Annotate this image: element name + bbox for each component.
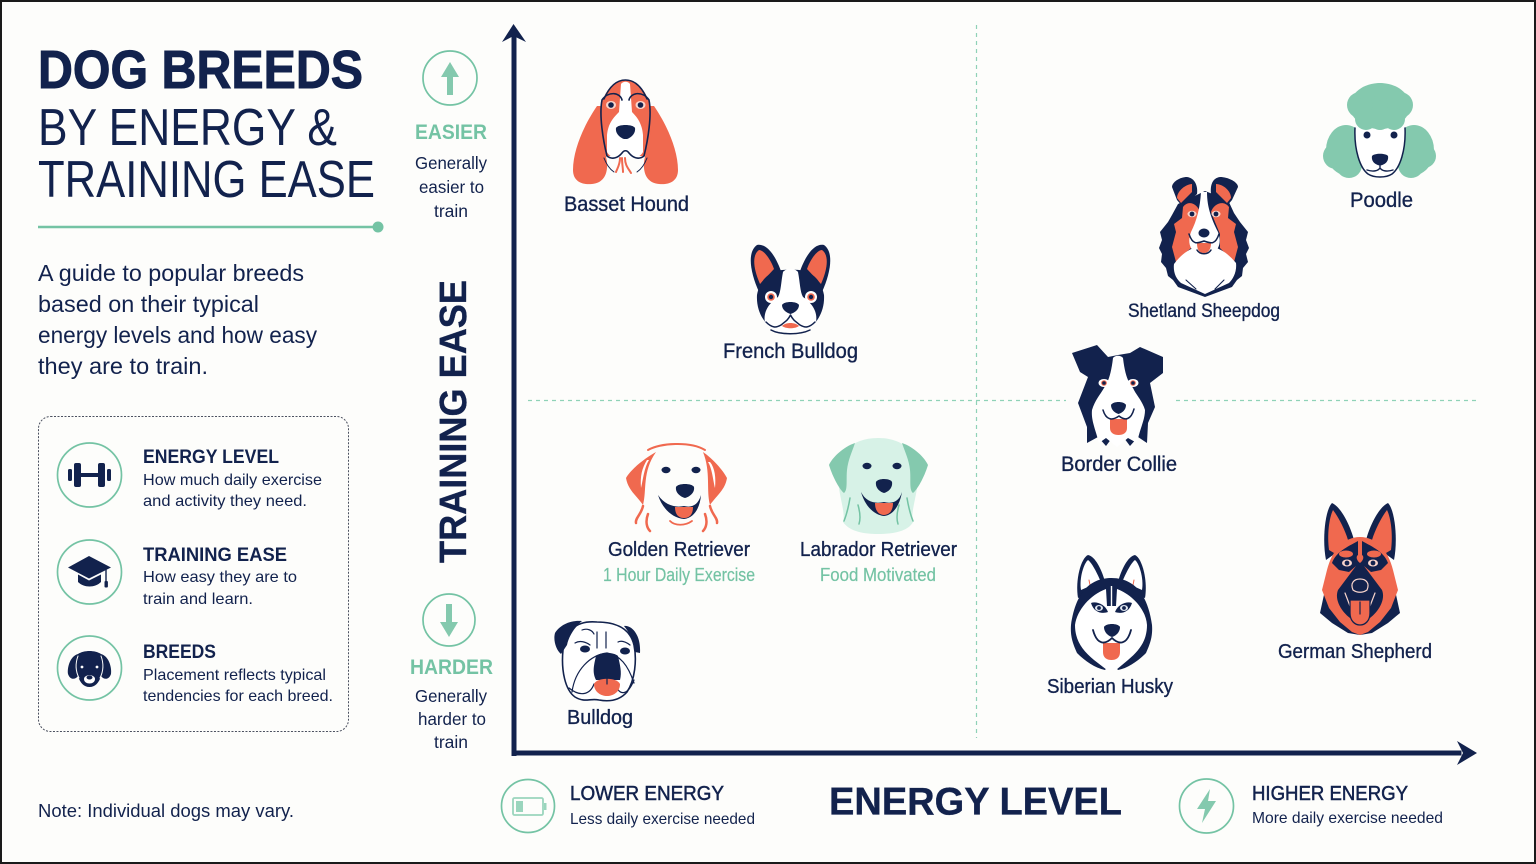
breed: golden retriever: Golden Retriever (608, 539, 750, 561)
icon: shetland sheepdog (1159, 177, 1249, 297)
icon: down arrow (423, 594, 475, 646)
breed: labrador retriever: Food Motivated (820, 565, 936, 585)
title (38, 40, 375, 209)
breed: shetland sheepdog (1128, 177, 1280, 322)
legend: breeds: Placement reflects typical (143, 667, 326, 684)
breed: poodle (1323, 83, 1436, 212)
breed: border collie: Border Collie (1061, 453, 1177, 476)
icon: up arrow (423, 51, 477, 105)
intro text: energy levels and how easy (38, 322, 317, 348)
lower energy indicator: LOWER ENERGY (570, 783, 724, 805)
intro text: they are to train. (38, 353, 208, 379)
lower energy indicator: Less daily exercise needed (570, 811, 755, 828)
icon: poodle (1323, 83, 1436, 178)
harder indicator: train (434, 732, 468, 752)
harder indicator: Generally (415, 686, 487, 706)
breed: french bulldog (723, 245, 858, 363)
icon: labrador retriever (829, 438, 928, 534)
breed: labrador retriever (800, 438, 957, 585)
icon: german shepherd (1320, 503, 1400, 635)
legend: training ease (143, 545, 297, 608)
breed: poodle: Poodle (1350, 189, 1413, 212)
icon: border collie (1066, 345, 1176, 447)
breed: siberian husky: Siberian Husky (1047, 676, 1173, 698)
note: Note: Individual dogs may vary. (38, 801, 294, 821)
easier indicator: EASIER (415, 121, 487, 144)
legend: energy level: How much daily exercise (143, 472, 322, 489)
legend: energy level (143, 447, 322, 510)
icon: golden retriever (626, 444, 727, 531)
legend: training ease: TRAINING EASE (143, 545, 287, 566)
title: TRAINING EASE (38, 151, 375, 209)
legend: breeds: tendencies for each breed. (143, 688, 333, 705)
intro text: A guide to popular breeds (38, 260, 304, 286)
icon: graduation cap (58, 540, 122, 604)
icon: siberian husky (1071, 555, 1152, 670)
icon: battery (502, 780, 554, 832)
legend: breeds (143, 642, 333, 705)
easier indicator (415, 51, 487, 221)
easier indicator: easier to (419, 177, 484, 197)
icon: dumbbell (58, 443, 122, 507)
intro text (38, 260, 317, 379)
title: BY ENERGY & (38, 99, 337, 157)
icon: lightning bolt (1180, 779, 1234, 833)
arrow: x axis (512, 741, 1477, 765)
higher energy indicator: HIGHER ENERGY (1252, 783, 1408, 805)
icon: dog head (58, 636, 122, 700)
breed: shetland sheepdog: Shetland Sheepdog (1128, 301, 1280, 322)
legend: breeds: BREEDS (143, 642, 216, 663)
harder indicator: HARDER (410, 656, 493, 679)
breed: labrador retriever: Labrador Retriever (800, 539, 957, 561)
breed: french bulldog: French Bulldog (723, 340, 858, 363)
breed: border collie (1061, 345, 1177, 476)
breed: german shepherd (1278, 503, 1432, 663)
breed: bulldog (554, 621, 640, 729)
breed: golden retriever: 1 Hour Daily Exercise (603, 565, 755, 585)
easier indicator: train (434, 201, 468, 221)
arrow: y axis (502, 24, 526, 756)
higher energy indicator (1180, 779, 1443, 833)
breed: german shepherd: German Shepherd (1278, 641, 1432, 663)
breed: basset hound: Basset Hound (564, 193, 689, 216)
legend: energy level: and activity they need. (143, 493, 307, 510)
lower energy indicator (502, 780, 755, 832)
breed: bulldog: Bulldog (567, 707, 633, 729)
harder indicator: harder to (418, 709, 486, 729)
intro text: based on their typical (38, 291, 259, 317)
legend: training ease: How easy they are to (143, 569, 297, 586)
easier indicator: Generally (415, 153, 487, 173)
higher energy indicator: More daily exercise needed (1252, 810, 1443, 827)
harder indicator (410, 594, 493, 752)
breed: siberian husky (1047, 555, 1173, 698)
breed: golden retriever (603, 444, 755, 585)
y axis title: TRAINING EASE (433, 280, 475, 563)
panel: legend (38, 416, 348, 732)
icon: bulldog (554, 621, 640, 701)
x axis title: ENERGY LEVEL (829, 780, 1122, 824)
legend: energy level: ENERGY LEVEL (143, 447, 279, 468)
title: DOG BREEDS (38, 40, 363, 100)
icon: french bulldog (751, 245, 830, 334)
icon: basset hound (573, 80, 678, 184)
breed: basset hound (564, 80, 689, 216)
legend: training ease: train and learn. (143, 591, 253, 608)
